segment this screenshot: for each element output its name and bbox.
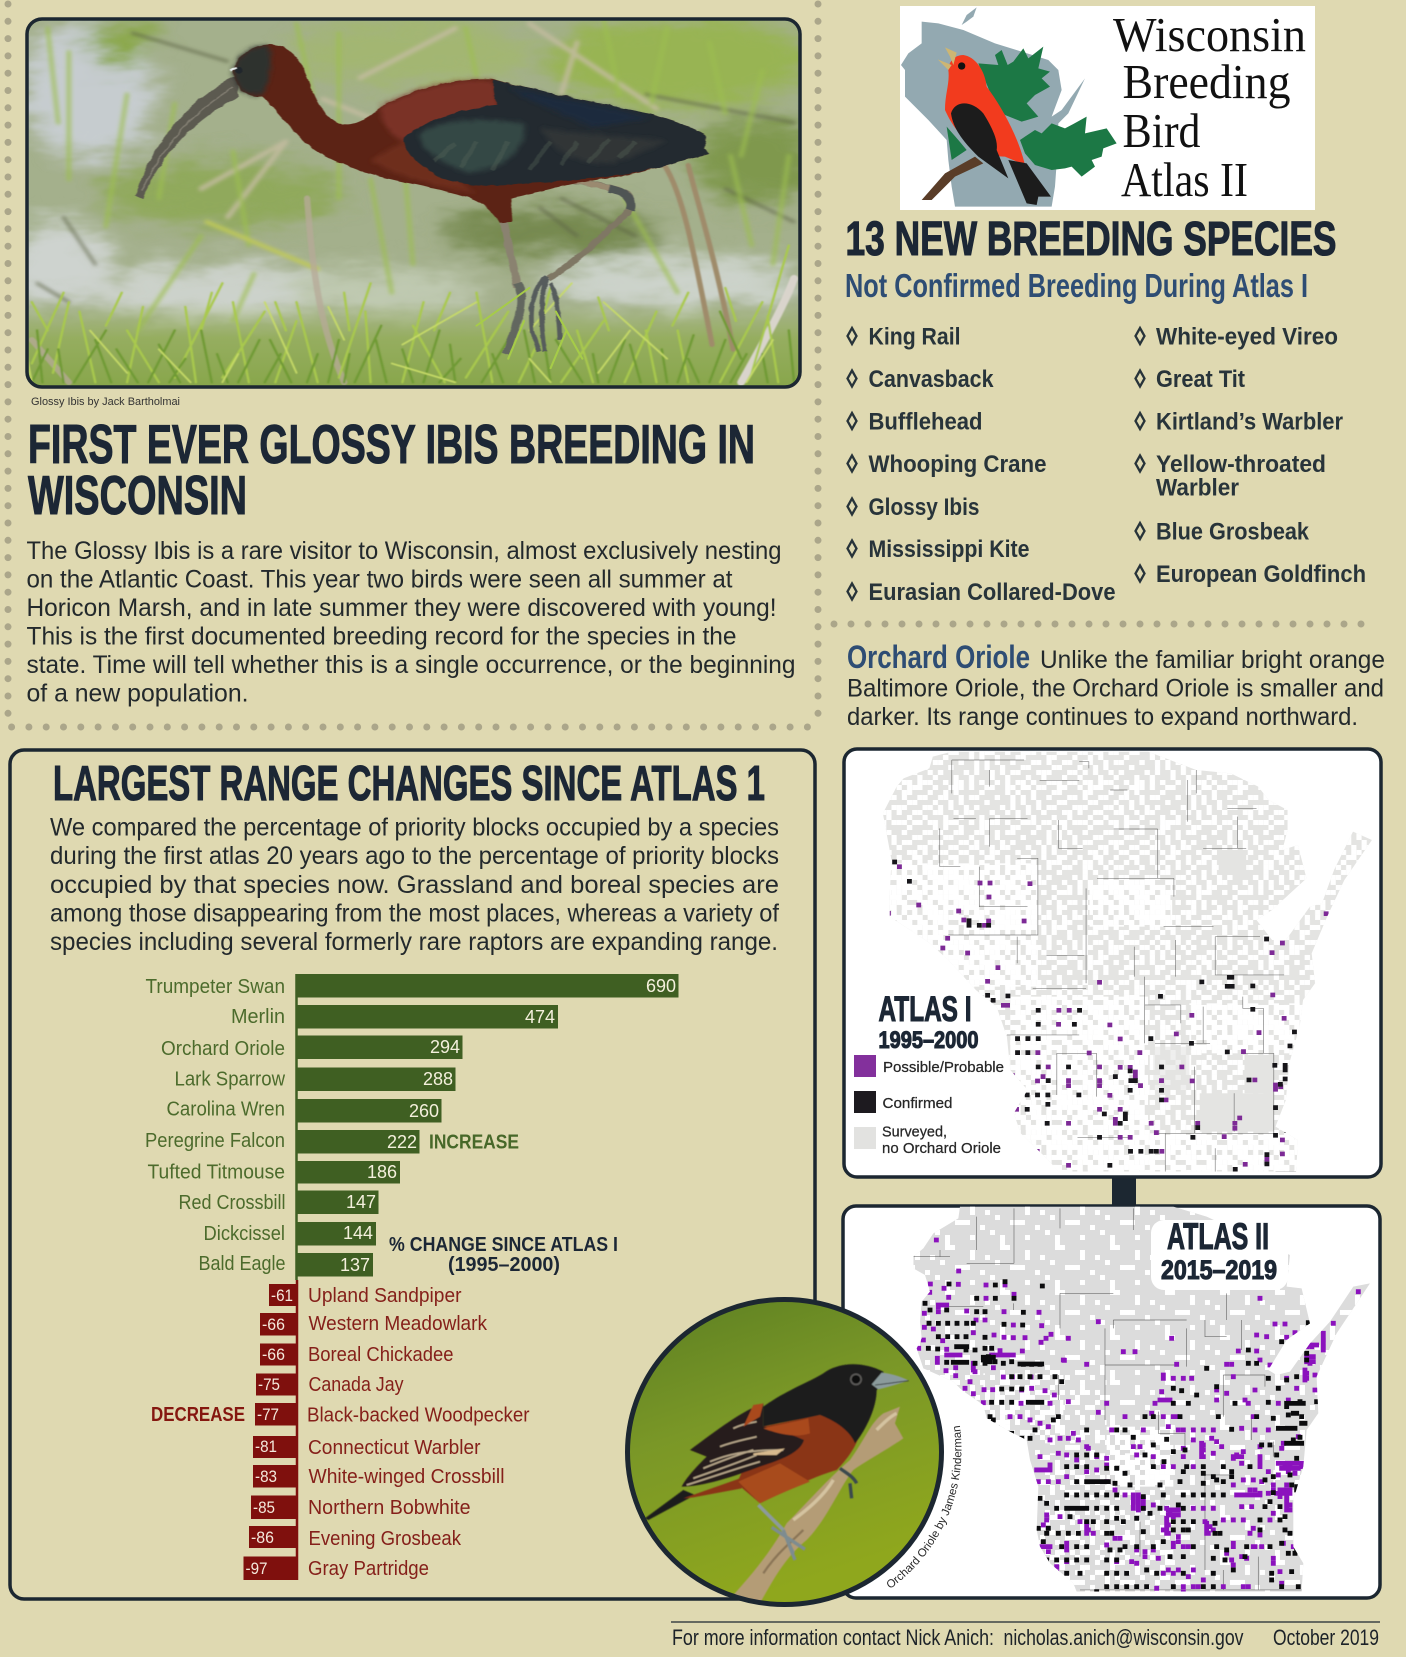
bar chart: decreases: Western Meadowlark	[308, 1313, 488, 1335]
photo: glossy ibis	[5, 14, 821, 392]
footer: October 2019	[1273, 1625, 1379, 1650]
text block: method description: during the first atlas 20 years ago to the percentage of priority blocks	[50, 842, 779, 870]
label: atlas II	[1151, 1216, 1288, 1290]
text block: glossy ibis story: Horicon Marsh, and in late summer they were discovered with young!	[26, 594, 776, 622]
text block: orchard oriole: Orchard Oriole	[847, 639, 1030, 675]
bar chart: increases: 294	[430, 1037, 460, 1057]
text block: method description	[50, 814, 779, 956]
bar chart: decreases: -85	[253, 1498, 275, 1517]
list: new breeding species: Yellow-throated	[1156, 451, 1326, 478]
list: new breeding species: Kirtland’s Warbler	[1156, 408, 1343, 436]
bar chart: increases: 137	[340, 1255, 370, 1275]
text block: glossy ibis story: This is the first documented breeding record for the species in the	[26, 622, 736, 650]
label: atlas II: ATLAS II	[1167, 1216, 1269, 1257]
bar chart: decreases: -75	[258, 1375, 280, 1394]
bar chart: increases: Peregrine Falcon	[145, 1130, 285, 1152]
legend: atlas map: no Orchard Oriole	[882, 1140, 1001, 1157]
bar chart: decreases: -86	[251, 1528, 274, 1547]
logo wordmark: Breeding	[1122, 56, 1290, 109]
list: new breeding species: Canvasback	[868, 366, 994, 393]
bar chart: decreases: Northern Bobwhite	[308, 1497, 470, 1519]
bar chart: decreases: -81	[255, 1437, 277, 1456]
photo: orchard oriole	[628, 1300, 942, 1604]
text block: orchard oriole: Baltimore Oriole, the Orchard Oriole is smaller and	[847, 674, 1384, 702]
list: new breeding species	[848, 324, 1366, 606]
bar chart: increases: 260	[409, 1101, 439, 1121]
heading: first ever glossy ibis: FIRST EVER GLOSSY IBIS BREEDING IN	[28, 413, 755, 475]
oriole branch	[733, 1407, 903, 1603]
list: new breeding species: King Rail	[868, 324, 960, 350]
logo wordmark	[1113, 9, 1306, 207]
panel: atlas II map	[843, 1200, 1380, 1600]
bar chart: increases: Orchard Oriole	[161, 1038, 285, 1060]
bar chart: decreases	[244, 1280, 530, 1580]
bar chart: increases: Trumpeter Swan	[146, 976, 285, 998]
list: new breeding species: Mississippi Kite	[868, 536, 1030, 563]
label: atlas II: 2015–2019	[1161, 1255, 1277, 1285]
label: increase: INCREASE	[429, 1132, 519, 1154]
list: new breeding species: European Goldfinch	[1156, 561, 1366, 588]
list: new breeding species: Eurasian Collared-Dove	[868, 579, 1116, 606]
bar chart: decreases: Gray Partridge	[308, 1558, 429, 1580]
legend: atlas map: Surveyed,	[882, 1124, 947, 1140]
bar chart: increases: 474	[525, 1007, 555, 1027]
bar chart: increases: Bald Eagle	[198, 1253, 286, 1275]
bar chart: increases: Lark Sparrow	[174, 1068, 286, 1090]
map: atlas I distribution	[879, 750, 1375, 1173]
connector between maps	[1112, 1175, 1136, 1209]
text block: glossy ibis story: on the Atlantic Coast. This year two birds were seen all summer at	[26, 566, 733, 594]
heading: atlas I: ATLAS I	[878, 990, 972, 1029]
bar chart: increases: Merlin	[231, 1006, 285, 1028]
text block: orchard oriole: darker. Its range continues to expand northward.	[847, 703, 1358, 731]
list: new breeding species: Warbler	[1156, 474, 1239, 502]
list: new breeding species: White-eyed Vireo	[1156, 324, 1338, 350]
bar chart: decreases: Black-backed Woodpecker	[307, 1404, 530, 1426]
bar chart: increases: Dickcissel	[204, 1223, 285, 1245]
text block: glossy ibis story	[26, 537, 796, 708]
list: new breeding species: Glossy Ibis	[868, 494, 980, 521]
footer	[671, 1622, 1380, 1650]
list: new breeding species: Great Tit	[1156, 366, 1245, 393]
panel: largest range changes	[10, 750, 815, 1599]
list: new breeding species: Whooping Crane	[868, 451, 1046, 478]
bar chart: decreases: -83	[255, 1467, 277, 1486]
label: percent change: % CHANGE SINCE ATLAS I	[389, 1234, 618, 1256]
ibis body	[136, 45, 709, 354]
legend: atlas map: Confirmed	[882, 1095, 952, 1112]
logo: Wisconsin Breeding Bird Atlas II	[900, 6, 1315, 210]
bar chart: decreases: -97	[246, 1559, 268, 1578]
list: new breeding species: Blue Grosbeak	[1156, 518, 1310, 546]
panel: atlas I map	[844, 749, 1381, 1177]
map: atlas II distribution	[907, 1200, 1373, 1600]
label: percent change: (1995–2000)	[448, 1254, 560, 1276]
heading: atlas I	[878, 990, 978, 1054]
bar chart: increases: 147	[346, 1192, 376, 1212]
text block: glossy ibis story: of a new population.	[26, 680, 248, 708]
logo wordmark: Wisconsin	[1113, 9, 1306, 62]
bar chart: decreases: -77	[257, 1405, 279, 1424]
text block: method description: among those disappearing from the most places, whereas a variety of	[50, 900, 779, 928]
list: new breeding species: Bufflehead	[868, 408, 982, 436]
heading: first ever glossy ibis: WISCONSIN	[28, 464, 247, 526]
footer: For more information contact Nick Anich:	[672, 1625, 994, 1650]
legend: atlas map	[854, 1055, 1004, 1157]
bar chart: increases	[145, 974, 678, 1280]
bar chart: increases: 144	[343, 1223, 373, 1243]
text block: glossy ibis story: state. Time will tell whether this is a single occurrence, or the beginning	[26, 651, 796, 679]
bar chart: increases: 222	[387, 1132, 417, 1152]
bar chart: decreases: -66	[262, 1345, 285, 1364]
text block: orchard oriole	[847, 639, 1385, 731]
icon: scarlet tanager on Wisconsin map	[901, 7, 1117, 207]
text block: method description: occupied by that species now. Grassland and boreal species are	[50, 871, 779, 899]
bar chart: increases: 186	[367, 1162, 397, 1182]
bar chart: increases: 690	[646, 976, 676, 996]
photo credit: oriole: Orchard Oriole by James Kinderman	[887, 1426, 962, 1588]
bar chart: decreases: -66	[262, 1315, 285, 1334]
bar chart: decreases: -61	[271, 1286, 293, 1305]
bar chart: decreases: Upland Sandpiper	[308, 1285, 462, 1307]
photo credit: ibis: Glossy Ibis by Jack Bartholmai	[31, 396, 180, 408]
bar chart: decreases: White-winged Crossbill	[308, 1466, 504, 1488]
text block: orchard oriole: Unlike the familiar bright orange	[1040, 646, 1385, 674]
oriole bird	[645, 1364, 909, 1560]
heading: largest range changes: LARGEST RANGE CHANGES SINCE ATLAS 1	[53, 757, 765, 811]
heading: atlas I: 1995–2000	[878, 1027, 978, 1054]
bar chart: decreases: Evening Grosbeak	[308, 1528, 462, 1550]
bar chart: decreases: Boreal Chickadee	[308, 1344, 454, 1366]
legend: atlas map: Possible/Probable	[883, 1059, 1004, 1076]
logo wordmark: Atlas II	[1121, 154, 1248, 207]
logo wordmark: Bird	[1122, 105, 1200, 158]
label: decrease: DECREASE	[151, 1404, 245, 1426]
text block: method description: We compared the percentage of priority blocks occupied by a species	[50, 814, 779, 842]
bar chart: decreases: Connecticut Warbler	[308, 1437, 481, 1459]
label: percent change	[389, 1234, 618, 1276]
bar chart: increases: Carolina Wren	[166, 1098, 285, 1120]
bar chart: decreases: Canada Jay	[308, 1374, 404, 1396]
bar chart: increases: Red Crossbill	[178, 1192, 286, 1214]
text block: glossy ibis story: The Glossy Ibis is a rare visitor to Wisconsin, almost exclusively nesting	[26, 537, 782, 565]
heading: first ever glossy ibis	[28, 413, 755, 526]
text block: method description: species including several formerly rare raptors are expanding range.	[50, 928, 778, 956]
bar chart: increases: 288	[423, 1069, 453, 1089]
bar chart: increases: Tufted Titmouse	[148, 1162, 285, 1184]
footer: nicholas.anich@wisconsin.gov	[1004, 1625, 1244, 1650]
